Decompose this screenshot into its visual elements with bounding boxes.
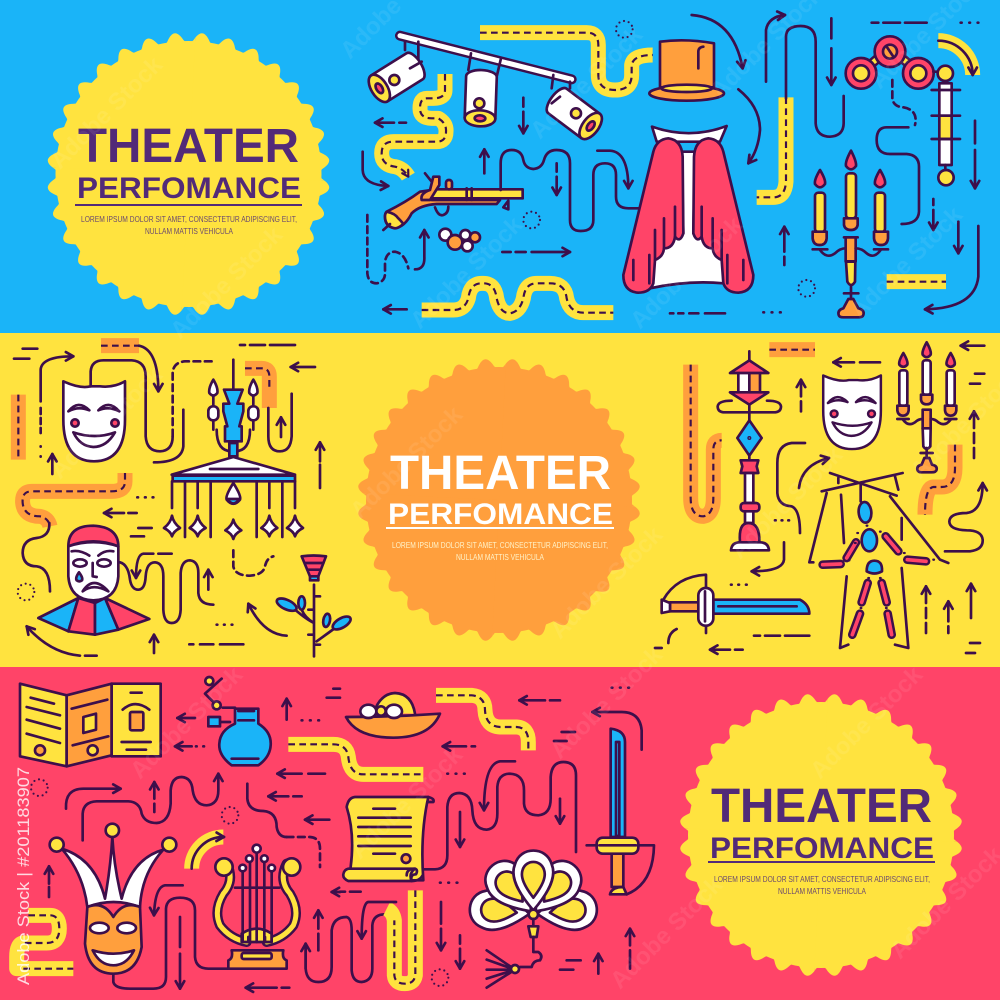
icon: sword (587, 729, 654, 894)
title: bottom badge heading: LOREM IPSUM DOLOR SIT AMET, CONSECTETUR ADIPISCING ELIT, (714, 875, 930, 884)
road: yellow U path (387, 890, 415, 984)
road: winding orange path (23, 473, 125, 526)
panel: yellow banner left icons (14, 345, 353, 656)
road: L shaped yellow path (757, 97, 786, 197)
title: bottom badge heading (708, 780, 935, 896)
icon: paper scroll (343, 797, 434, 881)
badge: top yellow seal (48, 33, 329, 315)
icon: cannon balls (439, 229, 480, 251)
icon: jester mask (50, 824, 230, 989)
arrows: flow lines (14, 345, 320, 656)
panel: yellow banner background (0, 333, 1000, 667)
icon: flintlock pistol (383, 173, 523, 230)
road: bottom yellow path (422, 283, 613, 313)
icon: feather fan (468, 851, 599, 988)
road: yellow arc (192, 837, 224, 869)
panel: blue banner left icons (363, 21, 653, 313)
icon: rapier sword (662, 575, 809, 633)
title: middle badge heading (386, 447, 614, 562)
title: top badge heading: LOREM IPSUM DOLOR SIT AMET, CONSECTETUR ADIPISCING ELIT, (81, 215, 297, 224)
arrows: flow lines (655, 346, 984, 653)
watermark: vertical stock id: Adobe Stock | #201183907 (14, 767, 33, 985)
icon: opera glasses (846, 36, 960, 185)
icon: candelabrum (897, 342, 956, 472)
watermark: faint stock labels: Adobe Stock (545, 641, 668, 764)
watermark: faint stock labels: Adobe Stock (845, 201, 968, 324)
watermark: faint stock labels: Adobe Stock (405, 211, 528, 334)
watermark: faint stock labels: Adobe Stock (805, 661, 928, 784)
icon: perfume bottle (205, 677, 271, 765)
road: number-shaped yellow path (17, 915, 73, 969)
icon: lyre (215, 845, 300, 969)
watermark: faint stock labels: Adobe Stock (45, 361, 168, 484)
panel: pink banner right icons (340, 688, 654, 988)
badge: middle orange seal (358, 359, 640, 641)
icon: folded brochure (20, 684, 161, 766)
watermark: faint stock labels: Adobe Stock (725, 441, 848, 564)
icon: stage cape (623, 126, 753, 293)
title: bottom badge heading: THEATER (711, 780, 932, 833)
road: winding yellow path (382, 74, 446, 177)
panel: blue banner right icons (623, 15, 978, 317)
road: top yellow path (480, 33, 653, 90)
title: middle badge heading: NULLAM MATTIS VEHICULA (456, 553, 544, 562)
watermark: faint stock labels: Adobe Stock (625, 211, 748, 334)
title: top badge heading: THEATER (78, 120, 299, 173)
watermark: faint stock labels: Adobe Stock (525, 21, 648, 144)
arrows: left flow lines (363, 21, 640, 309)
title: top badge heading (75, 120, 302, 236)
icon: street lantern (718, 351, 781, 550)
icon: stage lights (364, 36, 606, 143)
panel: pink banner background (0, 667, 1000, 1000)
icon: candelabrum (813, 151, 888, 317)
panel: blue banner background (0, 0, 1000, 333)
road: orange paths (691, 350, 955, 516)
icon: happy theatre mask (63, 381, 125, 461)
badge: bottom yellow seal (680, 694, 962, 976)
panel: pink banner left icons (17, 677, 423, 989)
arrows: flow lines (340, 688, 642, 986)
watermark: faint stock labels: Adobe Stock (545, 521, 668, 644)
title: top badge heading: NULLAM MATTIS VEHICULA (145, 227, 233, 236)
panel: yellow banner right icons (655, 342, 984, 653)
arrows: flow lines (31, 689, 393, 989)
watermark: faint stock labels: Adobe Stock (345, 741, 468, 864)
icon: marionette (809, 473, 948, 648)
watermark: faint stock labels: Adobe Stock (345, 401, 468, 524)
title: bottom badge heading: PERFOMANCE (710, 832, 934, 865)
road: short yellow bar (887, 259, 946, 304)
road: yellow zigzag path (436, 695, 528, 750)
title: middle badge heading: LOREM IPSUM DOLOR SIT AMET, CONSECTETUR ADIPISCING ELIT, (392, 541, 608, 550)
title: middle badge heading: THEATER (390, 447, 611, 500)
icon: lady's hat (346, 693, 440, 738)
title: top badge heading: PERFOMANCE (77, 172, 301, 205)
road: yellow arc (938, 41, 973, 75)
road: orange bars (18, 346, 269, 460)
watermark: faint stock labels: Adobe Stock (165, 221, 288, 344)
watermark: faint stock labels: Adobe Stock (45, 51, 168, 174)
icon: sad clown (38, 526, 149, 635)
title: bottom badge heading: NULLAM MATTIS VEHICULA (778, 887, 866, 896)
arrows: right flow lines (670, 15, 978, 313)
icon: top hat (649, 40, 724, 101)
icon: happy mask (823, 375, 881, 449)
icon: chandelier (164, 360, 303, 539)
road: top yellow path (288, 744, 423, 774)
title: middle badge heading: PERFOMANCE (388, 498, 613, 531)
watermark: faint stock labels: Adobe Stock (605, 871, 728, 994)
watermark: faint stock labels: Adobe Stock (125, 661, 248, 784)
icon: rose (275, 555, 353, 656)
